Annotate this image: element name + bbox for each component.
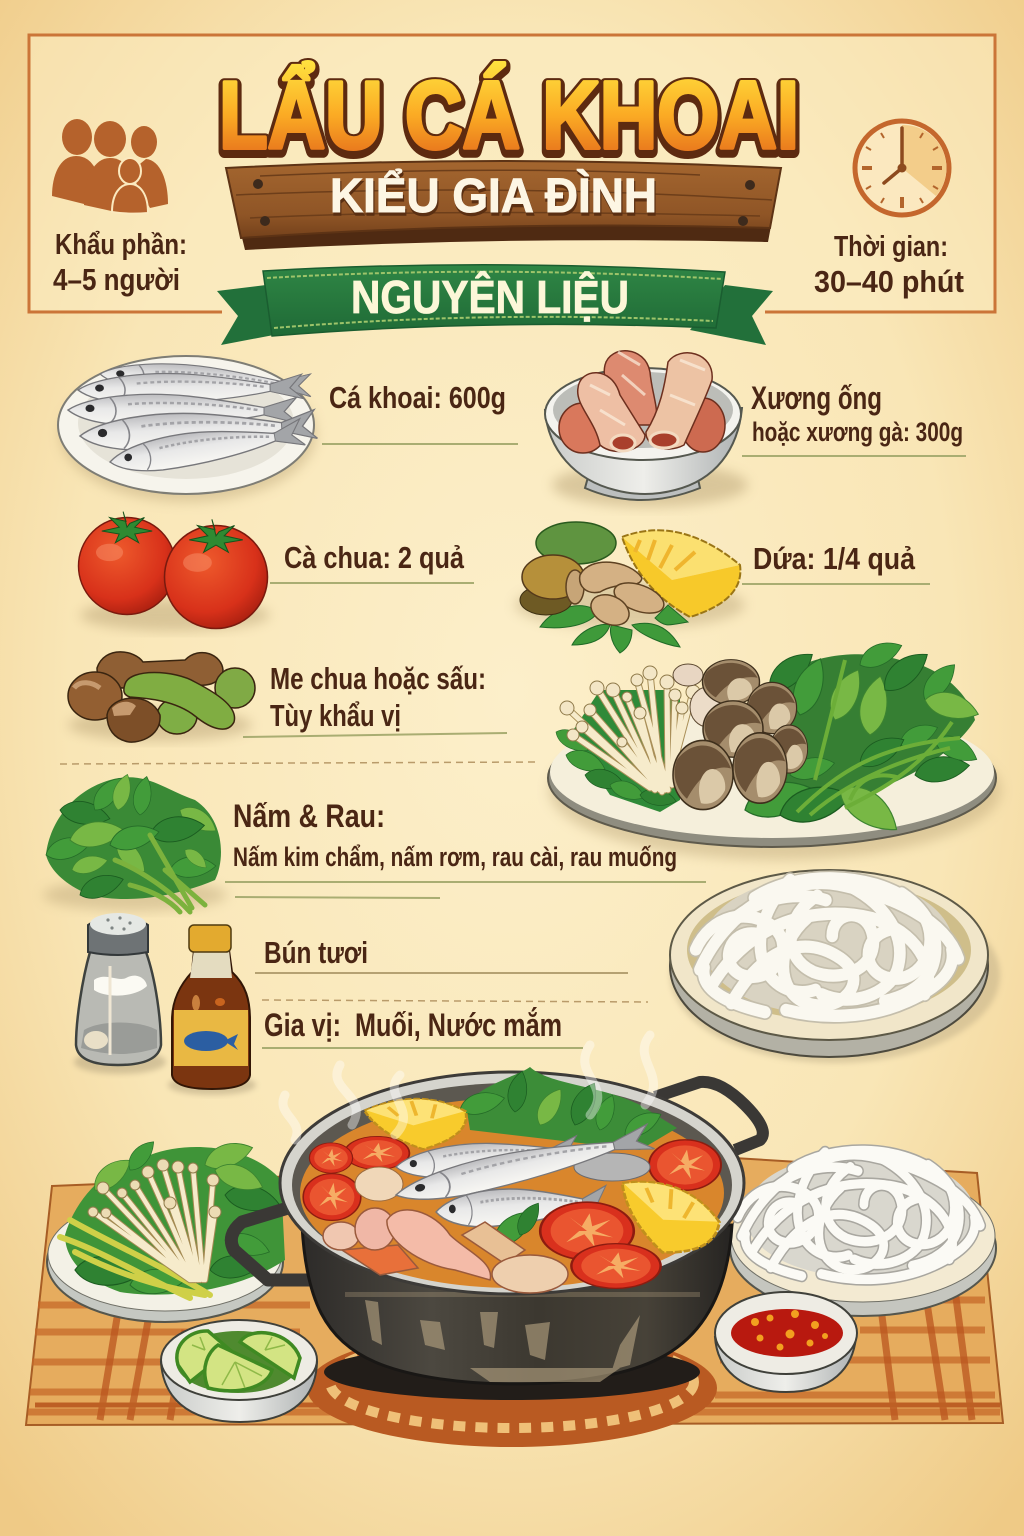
icon: clock bbox=[855, 121, 949, 215]
label: tamarind bbox=[243, 661, 507, 737]
servings label bbox=[53, 229, 187, 297]
label: mushrooms and greens bbox=[225, 798, 706, 898]
ingredient: fresh noodles plate bbox=[670, 870, 1000, 1063]
label: tamarind: Tùy khẩu vị bbox=[270, 698, 401, 733]
label: tamarind: Me chua hoặc sấu: bbox=[270, 661, 486, 696]
time label bbox=[814, 231, 964, 299]
divider dashed lower bbox=[262, 1000, 648, 1002]
time label: Thời gian: bbox=[834, 231, 948, 263]
ingredient: pineapple, potato, ginger and leaves bbox=[515, 522, 745, 653]
label: seasoning: Gia vị: Muối, Nước mắm bbox=[264, 1007, 562, 1043]
ingredient: leafy greens bbox=[43, 772, 227, 912]
hotpot bbox=[231, 1067, 763, 1400]
ingredient: mushroom and vegetable plate bbox=[548, 635, 1001, 860]
ingredient: salt shaker bbox=[74, 913, 166, 1074]
placemat bbox=[26, 1158, 1003, 1425]
bowl of lime bbox=[161, 1320, 317, 1422]
bowl of chili sauce bbox=[715, 1292, 857, 1392]
ingredient: fish plate bbox=[58, 356, 317, 502]
steam bbox=[283, 1035, 654, 1140]
icon: family of people bbox=[52, 119, 168, 214]
ingredient: fish sauce bottle bbox=[168, 925, 256, 1095]
label: tomato: Cà chua: 2 quả bbox=[284, 540, 465, 575]
header frame bbox=[29, 35, 995, 312]
label: mushrooms and greens: Nấm & Rau: bbox=[233, 798, 385, 834]
green ribbon: NGUYÊN LIỆU bbox=[351, 271, 629, 323]
label: pineapple: Dứa: 1/4 quả bbox=[753, 541, 916, 576]
time label: 30–40 phút bbox=[814, 264, 964, 299]
title: LẨU CÁ KHOAI bbox=[219, 61, 799, 169]
wooden sign: KIỂU GIA ĐÌNH bbox=[330, 169, 657, 223]
trivet bbox=[307, 1329, 717, 1447]
wooden sign: KIỂU GIA ĐÌNH bbox=[331, 172, 658, 226]
label: bones: hoặc xương gà: 300g bbox=[752, 417, 963, 447]
label: fresh noodles: Bún tươi bbox=[264, 935, 368, 970]
label: fish: Cá khoai: 600g bbox=[329, 380, 506, 415]
green ribbon bbox=[217, 265, 773, 345]
divider dashed bbox=[60, 762, 540, 764]
label: bones: Xương ống bbox=[751, 380, 882, 416]
wooden sign bbox=[226, 161, 781, 250]
label: mushrooms and greens: Nấm kim chẩm, nấm rơm, rau cài, rau muống bbox=[233, 842, 677, 872]
title: LẨU CÁ KHOAI bbox=[219, 64, 799, 172]
label: bones bbox=[742, 380, 966, 456]
left plate of greens and enoki bbox=[47, 1136, 285, 1322]
right plate of noodles bbox=[730, 1150, 996, 1316]
ingredient: tomatoes bbox=[78, 512, 270, 631]
ingredient: tamarind and sau fruit bbox=[68, 652, 255, 742]
ingredient: bones in bowl bbox=[545, 351, 748, 507]
servings label: Khẩu phần: bbox=[55, 229, 187, 261]
servings label: 4–5 người bbox=[53, 262, 180, 297]
